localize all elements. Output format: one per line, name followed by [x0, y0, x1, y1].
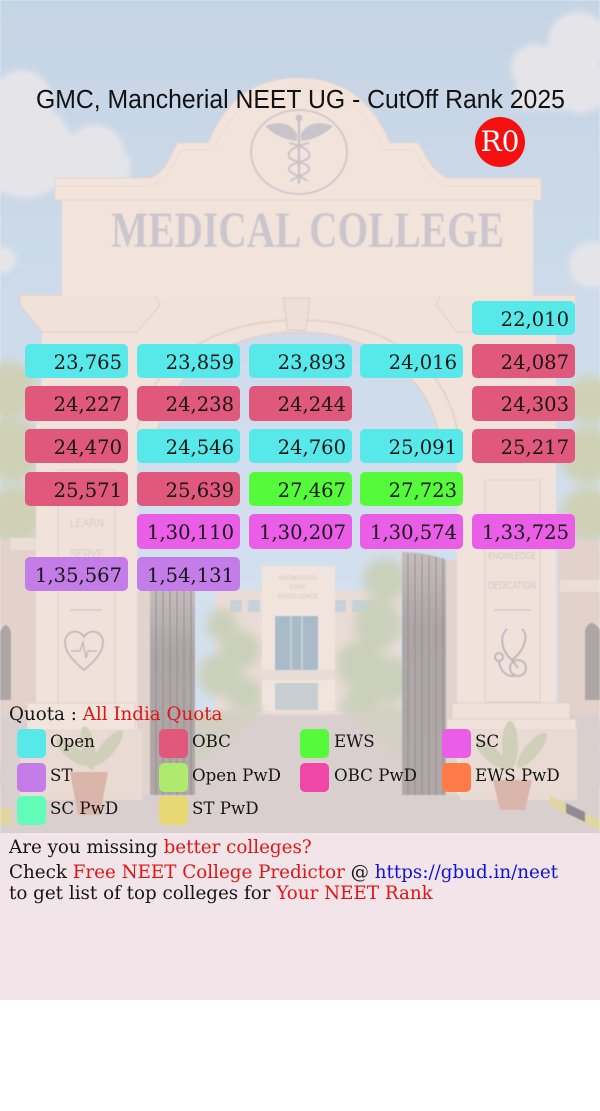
cutoff rank grid: 24,546	[166, 436, 234, 459]
row 7 cell: 1,35,567	[35, 564, 122, 587]
row 1	[472, 301, 575, 335]
cutoff rank grid: 24,303	[501, 393, 569, 416]
legend swatch: ST	[17, 763, 46, 792]
row 6 cell	[137, 514, 240, 549]
cutoff rank grid: 24,087	[501, 351, 569, 374]
legend swatch: SC	[442, 729, 471, 758]
legend swatch: SC PwD	[17, 796, 46, 825]
legend: EWS PwD	[475, 766, 560, 784]
predictor promo panel	[0, 833, 600, 1000]
side walls	[0, 540, 42, 840]
row 5 cell: 25,571	[54, 479, 122, 502]
legend swatch: EWS PwD	[442, 763, 471, 792]
cutoff rank grid: 25,217	[501, 436, 569, 459]
legend: ST	[50, 766, 72, 784]
row 7 cell	[25, 557, 128, 591]
central block	[262, 566, 335, 711]
pillar plaques	[58, 470, 115, 703]
legend: SC	[475, 732, 499, 751]
background illustration: medical college gate: DEDICATION	[488, 580, 536, 592]
cutoff rank grid: 1,30,574	[370, 521, 457, 544]
pediment	[62, 200, 533, 296]
cutoff rank grid: 24,016	[389, 351, 457, 374]
promo line 2: Check Free NEET College Predictor @ https://gbud.in/neet	[9, 862, 558, 883]
background illustration: medical college gate: LEARN	[70, 516, 104, 530]
heart icon	[65, 632, 103, 670]
legend swatch: OBC PwD	[300, 763, 329, 792]
cutoff rank grid: 24,238	[166, 393, 234, 416]
cutoff rank grid: 25,639	[166, 479, 234, 502]
cutoff rank grid: 24,760	[278, 436, 346, 459]
row 6 cell: 1,30,110	[147, 521, 234, 544]
legend	[17, 729, 560, 825]
legend: OBC PwD	[334, 766, 417, 784]
legend: Open	[50, 732, 95, 751]
distant building	[215, 590, 400, 715]
trees beside the gate	[0, 362, 600, 545]
cutoff rank grid: 25,091	[389, 436, 457, 459]
cutoff rank grid: 27,467	[278, 479, 346, 502]
row 1: 22,010	[501, 308, 569, 331]
round badge R0: R0	[481, 125, 519, 158]
row 3 cell: 24,227	[54, 393, 122, 416]
promo line 3: to get list of top colleges for Your NEET Rank	[9, 883, 433, 904]
cutoff rank grid: 1,30,207	[259, 521, 346, 544]
row 4 cell	[25, 429, 128, 463]
title: GMC, Mancherial NEET UG - CutOff Rank 2025	[36, 86, 565, 114]
potted plants	[52, 721, 552, 815]
promo line 1: Are you missing better colleges?	[9, 837, 312, 858]
row 5 cell	[25, 472, 128, 506]
background illustration: medical college gate: SERVE	[70, 547, 104, 561]
background illustration: medical college gate: CARE	[290, 585, 306, 591]
quota label: Quota : All India Quota	[9, 704, 222, 725]
legend: OBC	[192, 732, 231, 751]
background illustration: medical college gate: EXCELLENCE	[278, 594, 318, 600]
cutoff rank grid: 23,859	[166, 351, 234, 374]
legend: EWS	[334, 732, 375, 751]
side bushes	[0, 720, 600, 788]
background illustration: medical college gate: KNOWLEDGE	[278, 576, 318, 582]
cutoff rank grid: 24,244	[278, 393, 346, 416]
curb stripes	[550, 796, 600, 830]
garden trees	[198, 558, 412, 743]
stethoscope icon	[495, 629, 526, 676]
cutoff rank grid: 1,54,131	[147, 564, 234, 587]
legend: SC PwD	[50, 799, 118, 818]
gates	[150, 590, 195, 795]
legend: ST PwD	[192, 799, 259, 818]
cutoff rank grid: 1,33,725	[482, 521, 569, 544]
cutoff rank grid: 27,723	[389, 479, 457, 502]
medallion with caduceus	[251, 110, 347, 194]
legend swatch: OBC	[159, 729, 188, 758]
pillar plinths	[27, 703, 135, 730]
legend swatch: Open PwD	[159, 763, 188, 792]
row 2 cell: 23,765	[54, 351, 122, 374]
row 3 cell	[25, 386, 128, 421]
legend: Open PwD	[192, 766, 281, 784]
cutoff rank grid: 23,893	[278, 351, 346, 374]
legend swatch: ST PwD	[159, 796, 188, 825]
arch and facade	[20, 295, 576, 795]
legend swatch: EWS	[300, 729, 329, 758]
legend swatch: Open	[17, 729, 46, 758]
cutoff rank grid	[25, 301, 575, 591]
row 2 cell	[25, 344, 128, 378]
background illustration: medical college gate: KNOWLEDGE	[488, 551, 536, 562]
row 4 cell: 24,470	[54, 436, 122, 459]
pavement	[0, 715, 600, 840]
round badge R0	[475, 117, 525, 167]
